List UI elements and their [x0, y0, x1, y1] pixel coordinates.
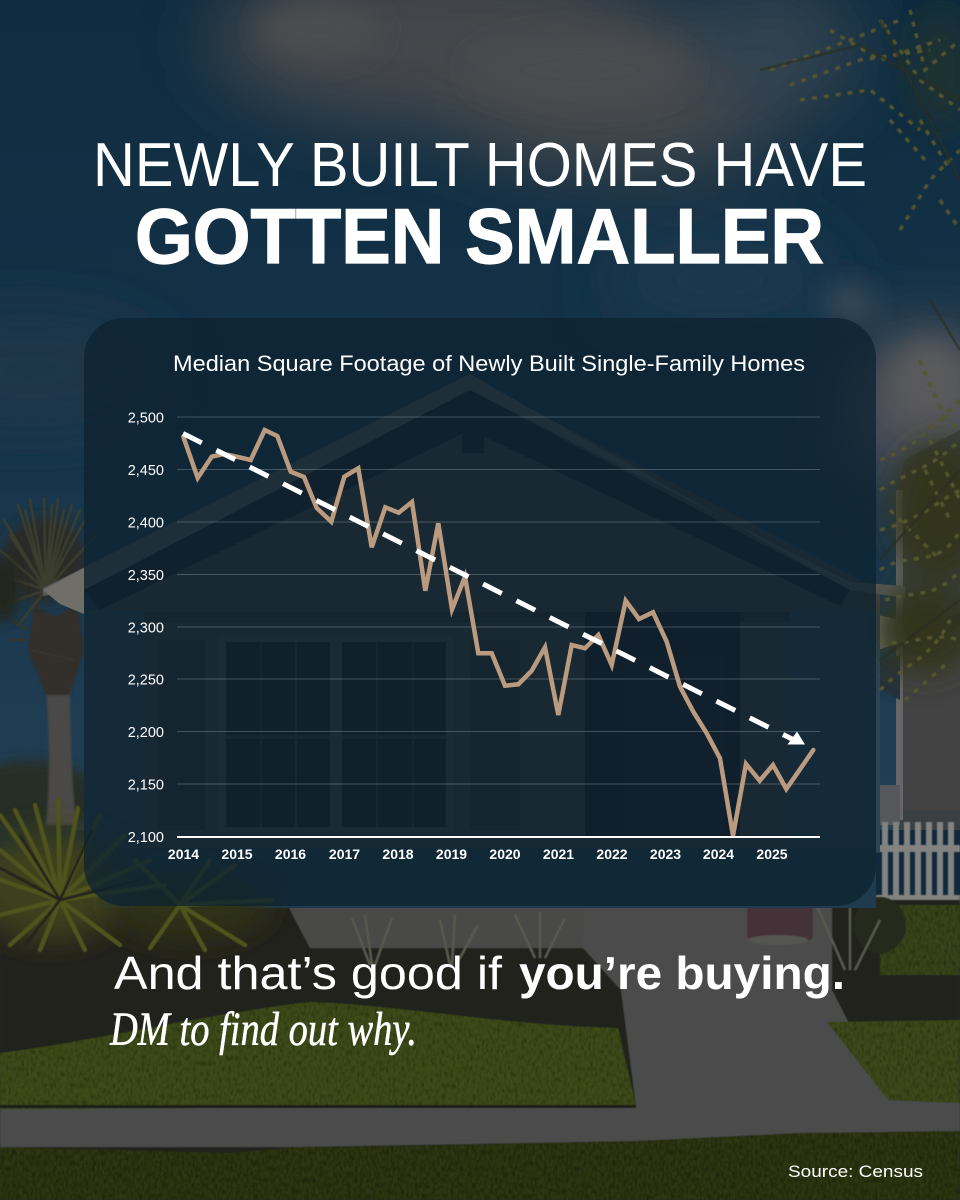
chart heading: Median Square Footage of Newly Built Single-Family Homes [173, 351, 805, 376]
arrow: dashed downward trend [183, 434, 805, 744]
italic call to action: DM to find out why. [109, 1003, 417, 1056]
shutters and windows [158, 640, 520, 830]
picket fence [876, 822, 960, 904]
call to action line: And that’s good if [114, 947, 502, 999]
y axis labels: 2,350 [128, 568, 164, 584]
call to action line [114, 947, 845, 999]
front door and porch [585, 612, 740, 837]
y axis labels: 2,150 [128, 778, 164, 794]
x axis labels: 2018 [382, 846, 414, 862]
y axis labels: 2,100 [128, 830, 164, 846]
source note: Source: Census [788, 1162, 923, 1181]
panel background [84, 318, 876, 906]
right neighbouring house [876, 430, 960, 830]
x axis labels: 2024 [703, 846, 734, 862]
palm tree [0, 498, 100, 825]
title line 2: GOTTEN SMALLER [135, 192, 824, 280]
x axis line [177, 836, 820, 838]
y axis labels [128, 410, 164, 846]
front palm bush [0, 800, 272, 950]
x axis labels [168, 846, 788, 862]
x axis labels: 2020 [489, 846, 521, 862]
call to action line: you’re buying. [519, 947, 845, 999]
distant trees [0, 760, 100, 840]
y axis grid [177, 417, 820, 784]
x axis labels: 2021 [543, 846, 574, 862]
x axis labels: 2019 [436, 846, 467, 862]
x axis labels: 2014 [168, 846, 199, 862]
x axis labels: 2023 [650, 846, 681, 862]
y axis labels: 2,500 [128, 410, 164, 426]
y axis labels: 2,400 [128, 516, 164, 532]
title [93, 131, 867, 280]
x axis labels: 2025 [756, 846, 788, 862]
x axis labels: 2017 [329, 846, 360, 862]
sky with clouds [0, 0, 960, 830]
x axis labels: 2022 [596, 846, 628, 862]
x axis labels: 2015 [221, 846, 253, 862]
base of porch behind chart panel [84, 848, 876, 908]
y axis labels: 2,300 [128, 620, 164, 636]
panel: chart [84, 318, 876, 906]
yard ground [0, 897, 960, 1200]
tree branches and leaves [760, 10, 960, 700]
x axis labels: 2016 [275, 846, 306, 862]
main house [43, 374, 905, 908]
title line 1: NEWLY BUILT HOMES HAVE [93, 131, 867, 200]
y axis labels: 2,450 [128, 463, 164, 479]
y axis labels: 2,200 [128, 725, 164, 741]
y axis labels: 2,250 [128, 672, 164, 688]
line chart: median square footage [183, 430, 813, 836]
